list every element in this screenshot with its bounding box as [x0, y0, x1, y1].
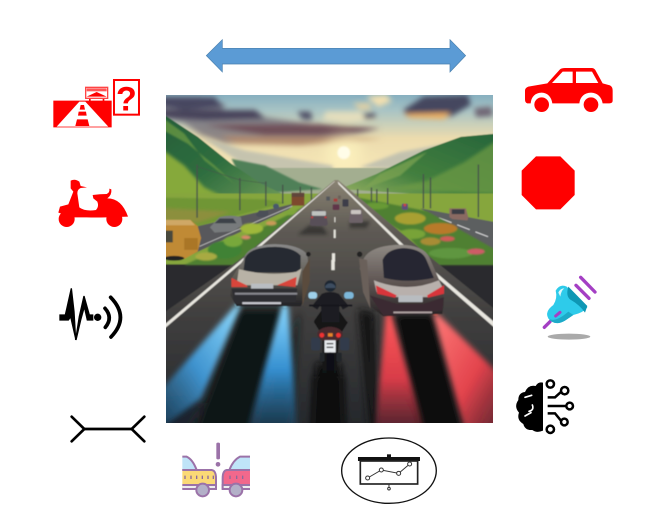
infographic canvas: [53, 39, 613, 504]
icon: scooter: [58, 180, 128, 227]
question mark: ?: [116, 81, 137, 119]
icon: stop octagon: [522, 156, 575, 209]
left car: [230, 244, 310, 306]
icon: narrowing connector: [72, 417, 144, 441]
distant traffic: [298, 196, 370, 235]
icon: AI brain circuit: [516, 380, 573, 433]
left carriageway: [196, 204, 292, 252]
right carriageway: [421, 208, 493, 250]
main road: [166, 180, 493, 423]
icon: ultrasound probe: [544, 277, 595, 340]
road shadows and light beams: [166, 302, 493, 423]
right car: [306, 245, 444, 316]
icon: signal waveform with sound waves: [60, 288, 120, 340]
icon: presentation chart in ellipse: [342, 438, 436, 503]
van: [166, 219, 202, 262]
icon: car: [525, 68, 613, 112]
motorcycle and rider: [308, 280, 354, 434]
truck: [292, 193, 304, 206]
oncoming cars: [210, 204, 279, 233]
double-headed arrow: [206, 40, 466, 72]
icon: road works sign with question mark: [53, 80, 139, 127]
central photo: highway with car and motorcycle light beams: [166, 95, 493, 423]
utility poles: [197, 165, 478, 218]
icon: car collision: [180, 443, 252, 496]
right flower verge: [360, 197, 493, 266]
right lane car: [402, 204, 468, 221]
lane markings: [166, 181, 493, 328]
left flower verge: [185, 208, 301, 266]
